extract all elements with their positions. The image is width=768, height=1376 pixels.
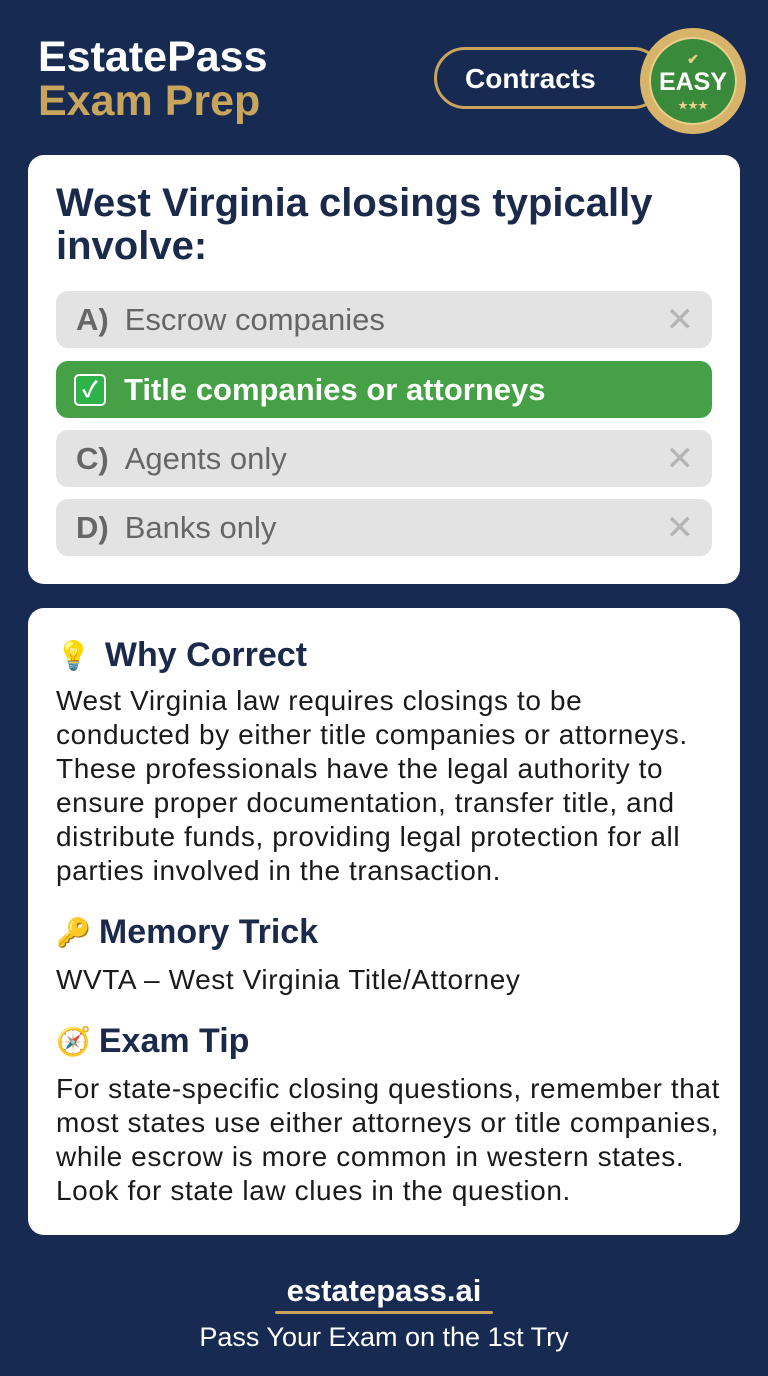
option A bbox=[56, 291, 712, 348]
option D: D) bbox=[76, 510, 109, 544]
logo: Exam Prep bbox=[38, 77, 260, 125]
heading: exam tip: Exam Tip bbox=[99, 1022, 249, 1060]
badge: EASY: EASY bbox=[659, 68, 727, 96]
logo bbox=[38, 33, 268, 125]
why text bbox=[56, 685, 688, 886]
badge: EASY: ✔ bbox=[687, 50, 699, 66]
tip text: while escrow is more common in western states. bbox=[56, 1141, 684, 1172]
category pill: Contracts bbox=[465, 63, 596, 94]
why text: distribute funds, providing legal protection for all bbox=[56, 821, 680, 852]
option A: Escrow companies bbox=[125, 302, 385, 336]
heading: exam tip: 🧭 bbox=[56, 1026, 91, 1057]
heading: why correct: 💡 bbox=[56, 640, 91, 671]
tip text: For state-specific closing questions, remember that bbox=[56, 1073, 720, 1104]
memory text: WVTA – West Virginia Title/Attorney bbox=[56, 964, 521, 995]
option B correct: ✓ bbox=[82, 376, 98, 402]
category pill bbox=[434, 47, 664, 109]
explanation card bbox=[28, 608, 740, 1235]
badge: EASY: ★★★ bbox=[678, 100, 708, 112]
option D bbox=[56, 499, 712, 556]
tip text: most states use either attorneys or title companies, bbox=[56, 1107, 719, 1138]
tip text bbox=[56, 1073, 720, 1206]
option C bbox=[56, 430, 712, 487]
logo: EstatePass bbox=[38, 33, 268, 81]
why text: parties involved in the transaction. bbox=[56, 855, 501, 886]
option D: Banks only bbox=[125, 510, 276, 544]
footer url: estatepass.ai bbox=[287, 1273, 481, 1308]
option C: C) bbox=[76, 440, 109, 476]
option A: A) bbox=[76, 302, 109, 336]
tip text: Look for state law clues in the question. bbox=[56, 1175, 571, 1206]
option B correct bbox=[56, 361, 712, 418]
question: West Virginia closings typically involve: bbox=[56, 181, 653, 268]
option C: Agents only bbox=[125, 440, 287, 476]
heading: why correct: Why Correct bbox=[105, 636, 307, 674]
why text: conducted by either title companies or attorneys. bbox=[56, 719, 688, 750]
why text: West Virginia law requires closings to be bbox=[56, 685, 582, 716]
heading: memory trick: 🔑 bbox=[56, 917, 91, 948]
option B correct: Title companies or attorneys bbox=[124, 372, 546, 406]
question card bbox=[28, 155, 740, 584]
option C: ✕ bbox=[666, 440, 694, 478]
option D: ✕ bbox=[666, 509, 694, 547]
heading: memory trick: Memory Trick bbox=[99, 913, 318, 951]
why text: ensure proper documentation, transfer title, and bbox=[56, 787, 675, 818]
badge: EASY bbox=[640, 28, 746, 134]
tagline: Pass Your Exam on the 1st Try bbox=[199, 1322, 569, 1352]
why text: These professionals have the legal authority to bbox=[56, 753, 663, 784]
option A: ✕ bbox=[666, 301, 694, 339]
